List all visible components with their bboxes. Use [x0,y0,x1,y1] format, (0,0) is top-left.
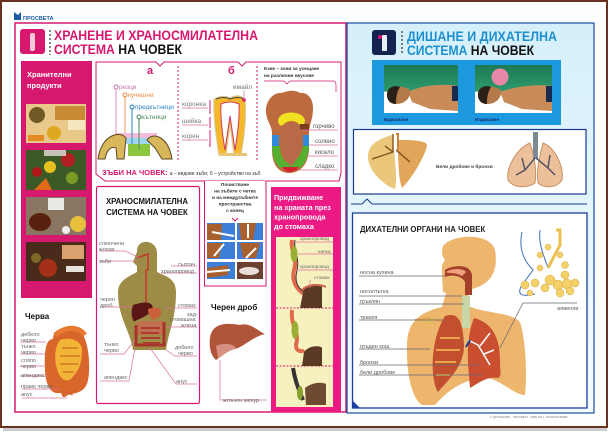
esophagus heading: до стомаха [274,222,315,231]
diagram: tongue taste zones: сладко [315,164,335,170]
diagram: tooth structure [182,83,252,156]
diagram: digestive organs: зад- [187,312,198,318]
respiratory labels: бели дробове [360,370,395,376]
lungs caption: Бели дробове и бронхи [436,163,493,170]
respiratory labels: носна кухина [360,270,395,276]
digestive heading: ХРАНОСМИЛАТЕЛНА [106,197,188,206]
diagram: digestive organs: черво [104,348,119,354]
diagram: intestines [20,328,89,398]
diagram: intestines: дебело [21,332,40,338]
diagram: digestive organs [99,241,198,385]
gallbladder label: жлъчен мехур [223,398,259,404]
food photo: dairy and meat [26,197,86,235]
diagram: digestive organs: апендикс [104,375,128,381]
diagram: digestive organs: стомах [178,303,196,309]
diagram: tooth types: кучешни [128,92,154,99]
diagram: tongue taste zones: кисело [315,150,335,156]
diagram: tongue taste zones: на различни вкусове [264,74,314,79]
diagram: tooth types: кътници [142,114,167,121]
diagram: digestive organs: жлези [99,247,114,253]
leader lines [359,276,577,375]
diagram: lungs [508,132,562,187]
diagram: tooth structure: шийка [182,117,201,125]
brushing photos [207,223,263,279]
panel: inhale and exhale photos [372,60,561,125]
panel: breathing frame [347,23,594,413]
respiratory labels: носоглътка [360,289,390,295]
letter a: а [147,65,154,77]
esophagus heading: Придвижване [274,193,323,202]
diagram: intestines: апендикс [21,373,45,379]
diagram: tooth structure: коронка [182,101,206,108]
panel: human teeth [96,62,341,181]
diagram: torso with airways [407,237,526,405]
diagram: tongue taste zones [264,66,338,173]
photo: real lungs [368,134,427,189]
diagram: digestive organs: стомашна [170,317,197,323]
photo: exhale [475,65,552,113]
tongue caption: Език – зони за усещане [264,66,320,72]
inhale caption: Вдишване [384,117,409,123]
panel: nutrition frame [15,23,346,412]
diagram: intestines: тънко [21,344,36,350]
diagram: tongue taste zones: солено [315,139,335,145]
diagram: digestive organs: тънко [104,342,119,348]
respiratory heading: ДИХАТЕЛНИ ОРГАНИ НА ЧОВЕК [360,225,485,234]
diagram: intestines: сляпо [21,358,36,364]
diagram: digestive organs: зъби [99,259,111,265]
icon: digestive figure [20,29,45,54]
brushing caption: и на междузъбните [212,194,258,201]
diagram: digestive organs: слюнчени [99,241,124,247]
panel: food products: Хранителни [27,70,72,79]
diagram: digestive organs: черво [178,351,193,357]
brushing caption: на зъбите с четка [214,188,256,194]
brushing caption [212,182,258,214]
respiratory labels: трахея [360,315,377,321]
panel: nutrition frame: СИСТЕМА НА ЧОВЕК [54,42,183,57]
esophagus heading [274,193,331,231]
intestine label: Черва [25,312,50,321]
panel: food through esophagus [271,187,341,412]
panel: lungs and bronchi [354,130,586,194]
photo: inhale [384,65,458,113]
imprint: © ДРУЖЕСТВО · ПРОСВЕТА · ISBN 2017 · ВСИЧКИ ПРАВА [490,415,568,419]
diagram: digestive organs: гълтач [178,262,195,268]
diagram: intestines: черво [21,350,36,356]
respiratory labels: бронхи [360,360,378,366]
heading: breathing: ДИШАНЕ И ДИХАТЕЛНА [407,29,557,44]
diagram: tongue taste zones: горчиво [313,124,335,130]
food photo: bread and pasta [26,104,86,143]
diagram: digestive organs: черен [100,297,115,303]
diagram: swallowing stages: хранопровод [300,265,329,270]
diagram: swallowing stages [276,237,333,407]
letter b: б [228,65,235,77]
diagram: digestive organs: жлеза [181,323,197,329]
diagram: tooth structure: емайл [233,83,252,91]
diagram: digestive organs: дроб [100,303,112,309]
esophagus heading: хранопровода [274,212,326,222]
diagram: tooth types: предкътници [135,104,174,111]
respiratory labels: гръклян [360,299,380,305]
diagram: digestive organs: дебело [175,345,194,351]
food photo: prepared dishes [26,242,86,281]
respiratory labels [360,270,578,376]
publisher logo: ПРОСВЕТА [23,16,53,22]
diagram: intestines: черво [21,364,36,370]
diagram: intestines: право черво [21,384,52,390]
brushing caption: Почистване [221,182,249,188]
esophagus heading: на храната през [274,203,331,212]
panel: food products: продукти [27,81,62,90]
divider with notch [351,199,587,204]
diagram: tooth types [98,84,174,159]
diagram: alveoli [520,230,579,297]
panel: food products [21,61,92,298]
panel: breathing frame: СИСТЕМА НА ЧОВЕК [407,43,535,58]
teeth caption: ЗЪБИ НА ЧОВЕК: а – видове зъби; б – устройство на зъб [102,168,260,177]
brushing caption: с конец [226,209,244,214]
food photo: vegetables [26,150,86,190]
heading: nutrition: ХРАНЕНЕ И ХРАНОСМИЛАТЕЛНА [54,28,258,43]
respiratory labels: алвеоли [557,306,578,312]
panel: respiratory organs [352,213,587,408]
brushing caption: пространства [219,202,252,208]
icon: respiratory figure [372,30,396,55]
diagram: intestines: черво [21,338,36,344]
diagram: tooth structure: корен [182,133,200,140]
diagram: liver [210,324,267,404]
diagram: swallowing stages: стомах [314,276,330,281]
diagram: swallowing stages: хранопровод [300,237,329,242]
panel: digestive system [96,186,200,404]
respiratory labels: гръден кош [360,344,390,350]
liver label: Черен дроб [211,303,257,312]
diagram: digestive organs: анус [176,379,188,385]
publisher logo [14,12,53,22]
exhale caption: Издишане [475,117,499,123]
diagram: swallowing stages: хапка [318,250,331,255]
panel: cleaning teeth [204,181,266,286]
diagram: digestive organs: хранопровод [161,269,195,275]
panel: digestive system: СИСТЕМА НА ЧОВЕК [106,208,188,217]
diagram: intestines: анус [21,392,33,398]
diagram: tooth types: резци [119,84,137,91]
